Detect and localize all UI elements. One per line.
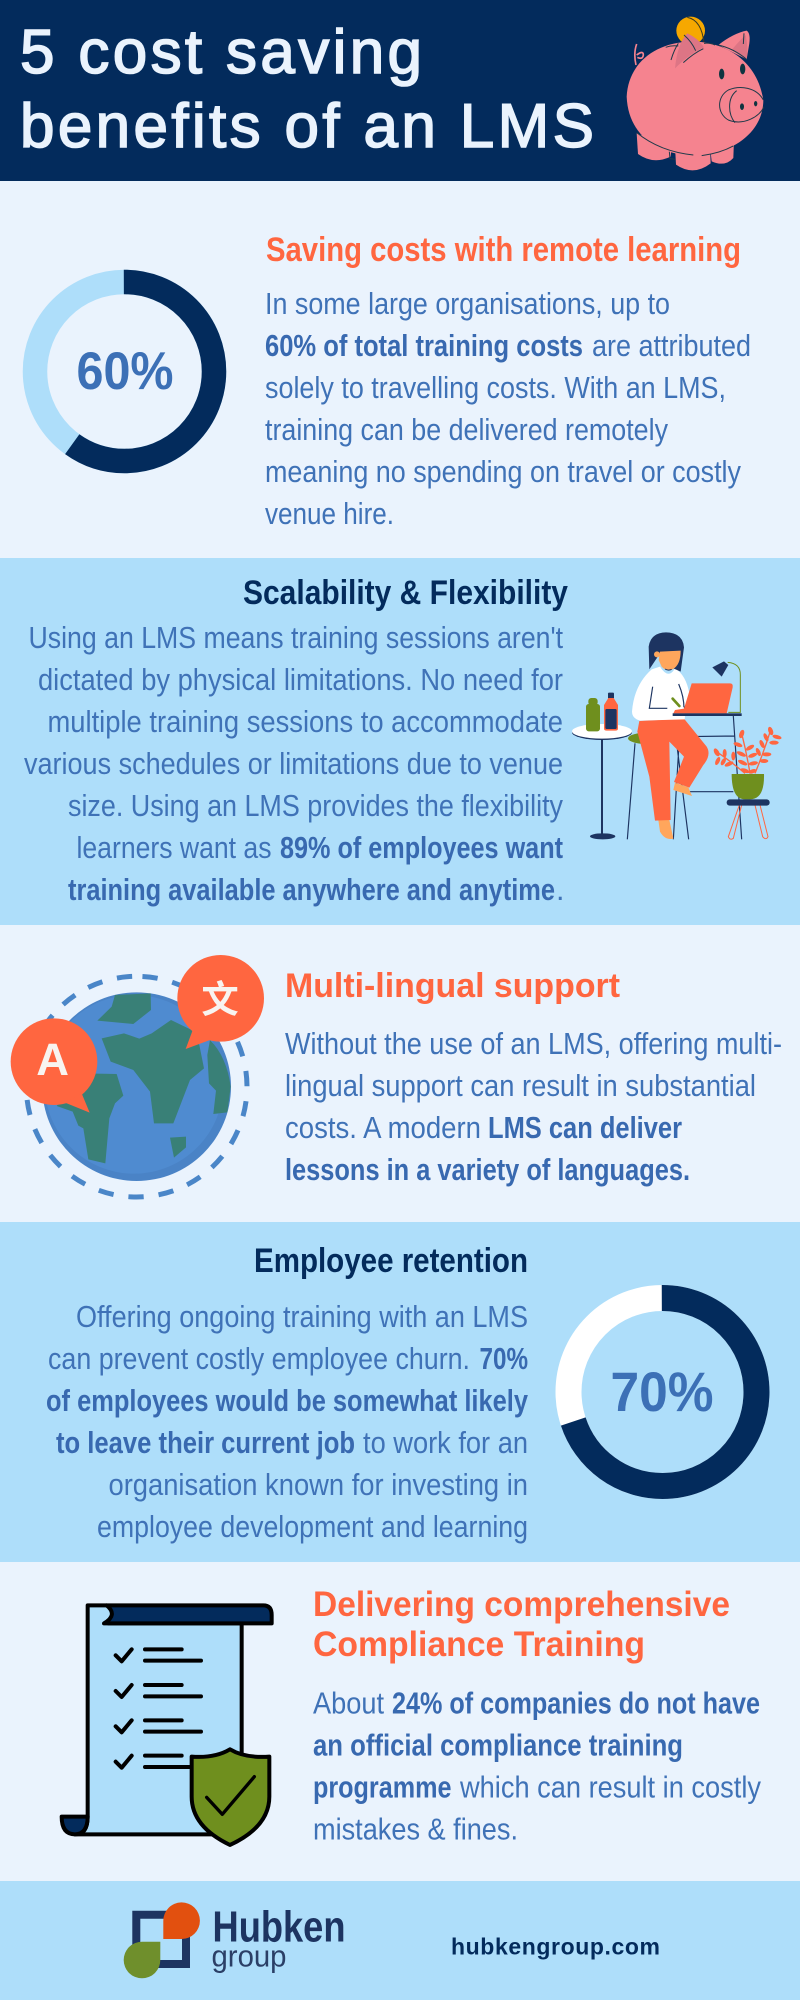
heading: [313, 1585, 730, 1664]
logo: Hubken group: Hubken: [212, 1902, 346, 1952]
text block: venue hire.: [265, 497, 394, 531]
text block: lingual support can result in substantial: [285, 1069, 756, 1103]
text block: are attributed: [592, 329, 751, 363]
title: [20, 18, 594, 161]
text block: costs. A modern: [285, 1111, 481, 1145]
text block: meaning no spending on travel or costly: [265, 455, 742, 489]
heading: Scalability & Flexibility: [243, 574, 568, 612]
text block: various schedules or limitations due to venue: [24, 747, 563, 781]
text block: employee development and learning: [97, 1510, 528, 1544]
text block: an official compliance training: [313, 1728, 683, 1762]
text block: to work for an: [363, 1426, 528, 1460]
panel: scalability and flexibility: [0, 558, 800, 925]
text block: which can result in costly: [459, 1770, 762, 1804]
logo: Hubken group: group: [212, 1938, 286, 1974]
text block: 60% of total training costs: [265, 329, 583, 363]
text block: lessons in a variety of languages.: [285, 1153, 690, 1187]
title: 5 cost saving: [20, 18, 422, 87]
text block: organisation known for investing in: [108, 1468, 528, 1502]
text block: Offering ongoing training with an LMS: [76, 1300, 528, 1334]
icon: globe with speech bubbles: [11, 955, 264, 1203]
text block: In some large organisations, up to: [265, 287, 670, 321]
text block: 89% of employees want: [280, 831, 563, 865]
donut chart: 70%: [568, 1298, 756, 1486]
donut chart: 60%: 60%: [76, 342, 174, 401]
text block: [24, 621, 564, 907]
panel: compliance training: [0, 1562, 800, 1881]
bubble: chinese character: [177, 955, 264, 1049]
text block: About: [313, 1686, 384, 1720]
text block: training can be delivered remotely: [265, 413, 669, 447]
bubble: chinese character: 文: [201, 969, 239, 1023]
title: benefits of an LMS: [20, 92, 594, 161]
website url: hubkengroup.com: [451, 1934, 660, 1960]
text block: 70%: [480, 1342, 528, 1376]
icon: checklist scroll with shield: [62, 1605, 272, 1845]
potted plant: [712, 726, 782, 839]
side table: [572, 693, 632, 839]
icon: piggy bank: [627, 17, 764, 170]
illustration: woman working at laptop: [572, 632, 782, 839]
heading: Multi-lingual support: [285, 967, 620, 1005]
text block: [265, 287, 751, 531]
text block: of employees would be somewhat likely: [46, 1384, 528, 1418]
text block: mistakes & fines.: [313, 1812, 518, 1846]
panel: saving costs with remote learning: [0, 181, 800, 558]
text block: LMS can deliver: [488, 1111, 682, 1145]
text block: to leave their current job: [56, 1426, 355, 1460]
text block: solely to travelling costs. With an LMS,: [265, 371, 726, 405]
text block: learners want as: [76, 831, 272, 865]
panel: header: [0, 0, 800, 181]
donut chart: 60%: [35, 282, 214, 461]
panel: multi-lingual support: [0, 925, 800, 1222]
text block: multiple training sessions to accommodate: [48, 705, 563, 739]
heading: Compliance Training: [313, 1625, 645, 1664]
panel: employee retention: [0, 1222, 800, 1562]
text block: programme: [313, 1770, 452, 1804]
donut chart: 70%: 70%: [610, 1360, 714, 1423]
text block: [313, 1686, 762, 1846]
text block: .: [556, 873, 564, 907]
text block: can prevent costly employee churn.: [48, 1342, 470, 1376]
panel: footer: [0, 1881, 800, 2000]
text block: Using an LMS means training sessions aren't: [28, 621, 563, 655]
bubble: latin letter: A: [36, 1034, 69, 1085]
text block: [46, 1300, 528, 1544]
text block: training available anywhere and anytime: [68, 873, 555, 907]
heading: Delivering comprehensive: [313, 1585, 730, 1624]
logo: Hubken group: [124, 1902, 345, 1978]
bubble: latin letter: [11, 1018, 97, 1113]
heading: Employee retention: [254, 1242, 528, 1280]
text block: size. Using an LMS provides the flexibility: [68, 789, 564, 823]
text block: [285, 1027, 782, 1187]
text block: dictated by physical limitations. No need for: [38, 663, 563, 697]
